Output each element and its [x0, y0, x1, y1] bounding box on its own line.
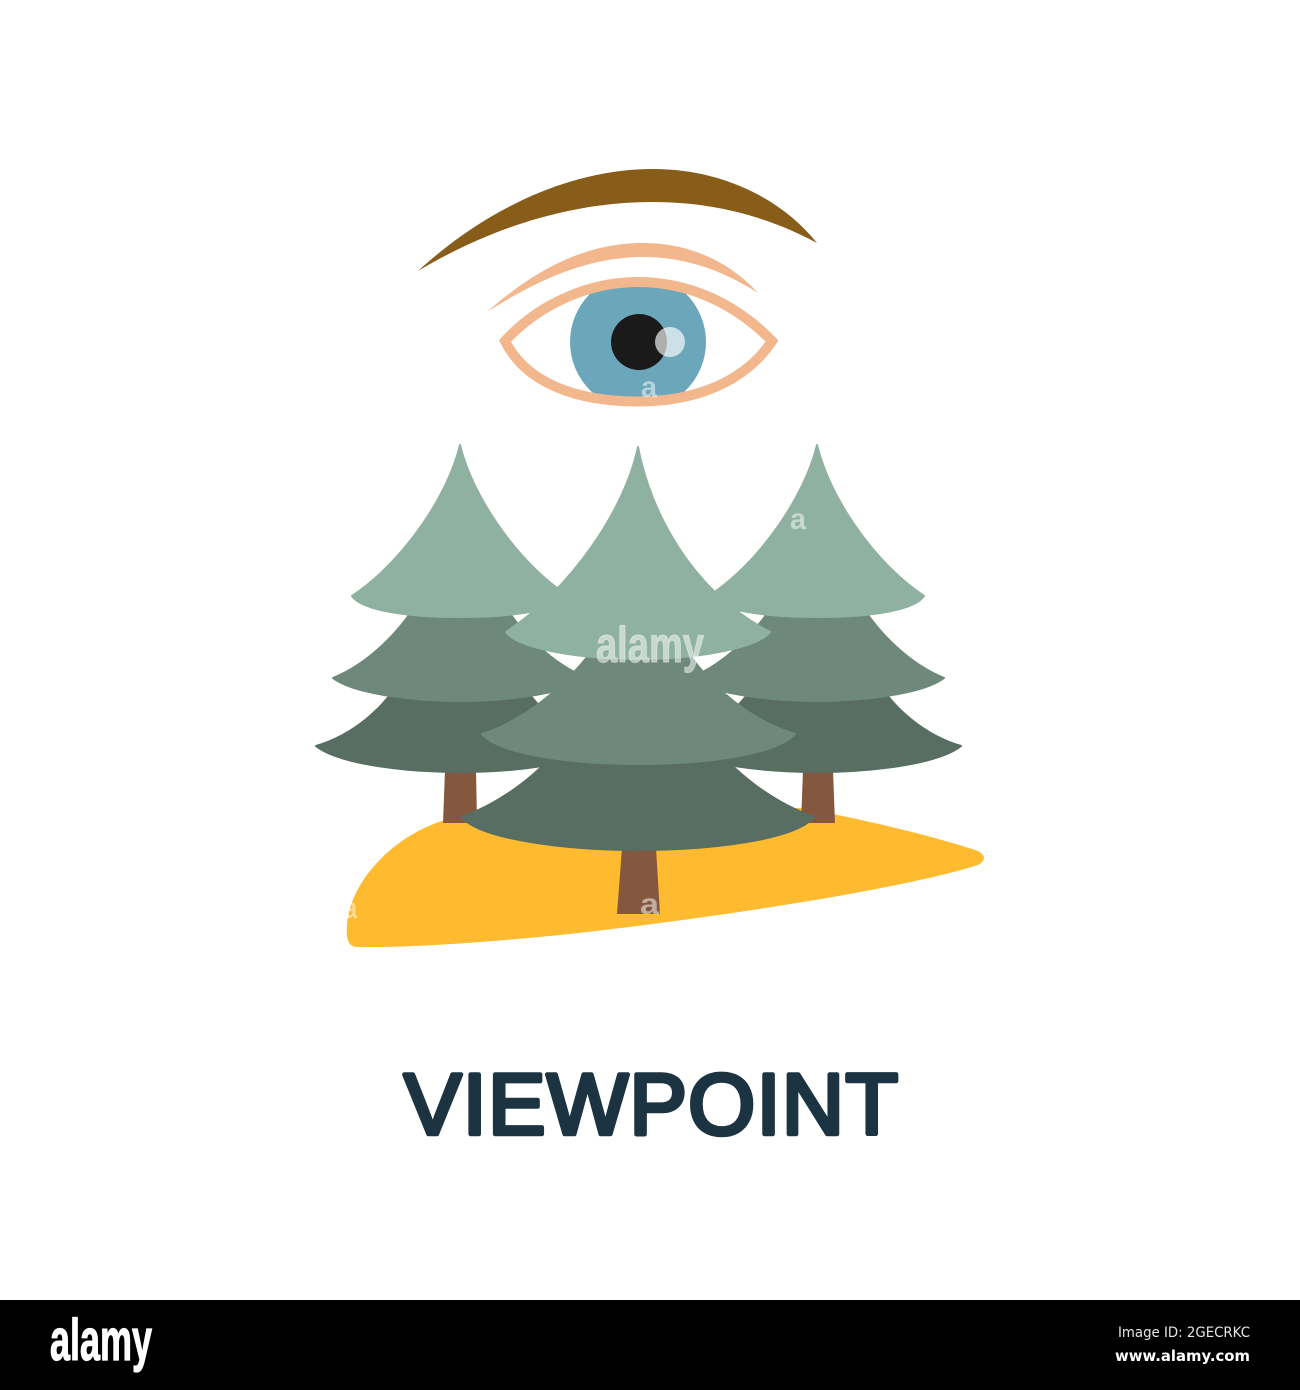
middle tier — [482, 640, 795, 764]
image id: Image ID: 2GECRKC — [1118, 1325, 1250, 1341]
upper eyelid crease — [487, 243, 758, 312]
title: VIEWPOINT — [404, 1057, 898, 1153]
top tier — [506, 447, 770, 659]
middle tier — [333, 590, 587, 701]
trunk — [801, 770, 835, 823]
tree: center pine — [462, 447, 814, 914]
eye highlight — [655, 327, 685, 357]
pupil — [611, 314, 667, 370]
watermark overlays: alamy — [596, 617, 704, 673]
footer logo: alamy — [50, 1308, 152, 1373]
watermark overlays: a — [345, 892, 357, 925]
watermark overlays — [345, 371, 806, 925]
ground: yellow hill — [347, 808, 984, 947]
top tier — [352, 445, 568, 617]
bottom tier — [673, 672, 961, 772]
trunk — [443, 770, 477, 823]
watermark overlays: a — [641, 371, 657, 404]
eye outline — [505, 282, 772, 402]
watermark overlays: a — [640, 888, 659, 921]
bottom tier — [462, 735, 814, 850]
trunk — [617, 848, 660, 914]
iris — [570, 287, 706, 396]
eyebrow — [418, 169, 817, 271]
top tier — [709, 445, 924, 617]
watermark overlays: a — [790, 503, 806, 536]
website: www.alamy.com — [1115, 1347, 1250, 1365]
bottom tier — [316, 672, 604, 772]
icon: eye with eyebrow — [418, 169, 817, 410]
tree: left pine — [316, 445, 604, 823]
footer bar — [0, 1300, 1300, 1390]
tree: right pine — [673, 445, 961, 823]
middle tier — [690, 590, 944, 701]
